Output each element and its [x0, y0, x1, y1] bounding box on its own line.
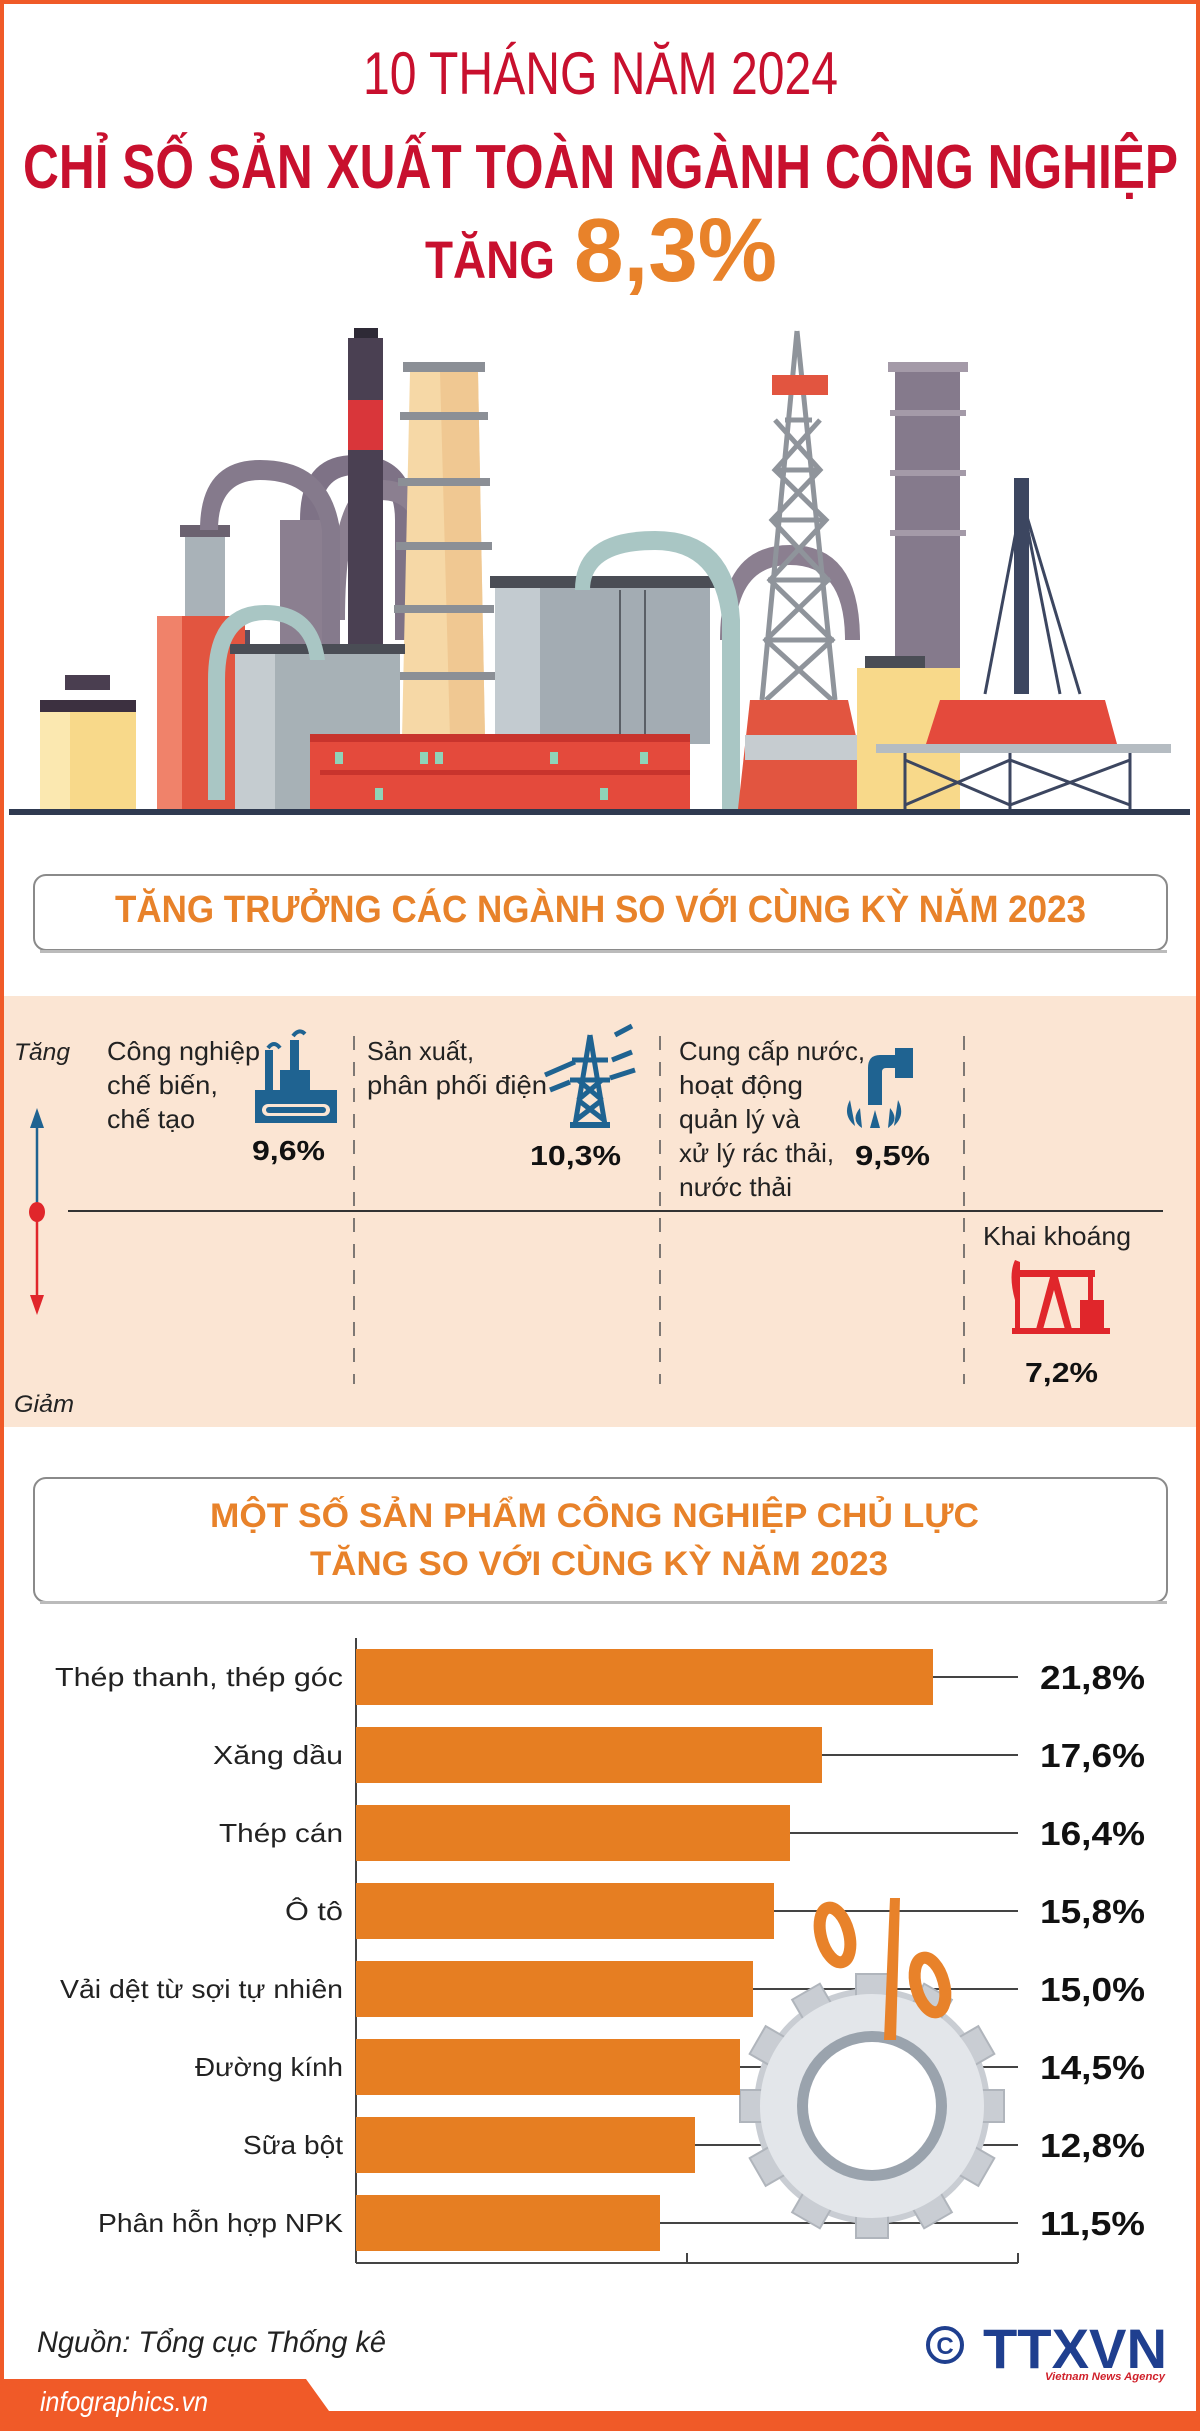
- bar chart: key products: 15,0%: [1040, 1971, 1145, 2008]
- bar chart: key products: 11,5%: [1040, 2205, 1145, 2242]
- sector: water supply: nước thải: [679, 1172, 792, 1202]
- logo: TTXVN: Vietnam News Agency: [1045, 2371, 1166, 2383]
- section header box 2: MỘT SỐ SẢN PHẨM CÔNG NGHIỆP CHỦ LỰC: [210, 1496, 979, 1535]
- logo: TTXVN: C: [936, 2333, 954, 2360]
- gear with percent icon: [740, 1898, 1004, 2238]
- section header box 1: [34, 875, 1167, 953]
- panel: sector growth: Tăng: [14, 1039, 71, 1066]
- right yellow tank: [865, 656, 925, 668]
- sector: electricity: [367, 1026, 635, 1171]
- bar chart: key products: 17,6%: [1040, 1737, 1145, 1774]
- illustration: industrial plant: [9, 328, 1190, 815]
- source note: Nguồn: Tổng cục Thống kê: [37, 2326, 386, 2359]
- icon: factory: [255, 1031, 337, 1123]
- title: 10 THÁNG NĂM 2024: [363, 40, 838, 107]
- bar chart: key products: Ô tô: [285, 1896, 343, 1926]
- title: 8,3%: [574, 201, 777, 301]
- sector: mining: Khai khoáng: [983, 1221, 1131, 1251]
- bar chart: key products: Phân hỗn hợp NPK: [98, 2208, 344, 2238]
- sector: electricity: 10,3%: [530, 1140, 621, 1171]
- left yellow tank: [65, 675, 110, 690]
- section header box 2: [34, 1478, 1167, 1604]
- left grey tank: [230, 644, 405, 654]
- sector: water supply: xử lý rác thải,: [679, 1138, 834, 1168]
- oil derrick: [762, 331, 835, 700]
- footer: infographics.vn: infographics.vn: [40, 2386, 208, 2417]
- center grey tank: [490, 576, 715, 588]
- red long building: [310, 734, 690, 809]
- sector: electricity: Sản xuất,: [367, 1036, 474, 1066]
- bar chart: key products: 16,4%: [1040, 1815, 1145, 1852]
- sector: manufacturing: [107, 1031, 337, 1166]
- sector: water supply: quản lý và: [679, 1104, 801, 1134]
- footer: infographics.vn: [0, 2379, 1200, 2431]
- axis arrow up/down: [29, 1108, 45, 1315]
- bar chart: key products: 14,5%: [1040, 2049, 1145, 2086]
- title: TĂNG: [425, 230, 555, 290]
- panel: sector growth: Giảm: [14, 1391, 74, 1418]
- sector: electricity: phân phối điện: [367, 1070, 547, 1100]
- grey chimney + red block: [180, 525, 230, 537]
- sector: manufacturing: chế tạo: [107, 1104, 195, 1134]
- sector: water supply: [679, 1036, 930, 1202]
- panel: sector growth: [4, 996, 1196, 1427]
- bar chart: key products: 15,8%: [1040, 1893, 1145, 1930]
- sector: water supply: 9,5%: [855, 1140, 930, 1171]
- sector: water supply: Cung cấp nước,: [679, 1036, 865, 1066]
- title: [23, 40, 1178, 301]
- section header box 2: TĂNG SO VỚI CÙNG KỲ NĂM 2023: [310, 1545, 888, 1583]
- sector: manufacturing: Công nghiệp: [107, 1036, 260, 1066]
- dark chimney: [354, 328, 378, 338]
- logo: TTXVN: TTXVN: [983, 2317, 1167, 2380]
- bar chart: key products: Xăng dầu: [213, 1740, 343, 1770]
- sector: manufacturing: chế biến,: [107, 1070, 218, 1100]
- sector: manufacturing: 9,6%: [252, 1135, 325, 1166]
- icon: water tap: [847, 1048, 913, 1128]
- teal arch pipe: [575, 531, 740, 809]
- yellow striped tower: [402, 372, 485, 738]
- right platform: [985, 500, 1080, 694]
- sector: water supply: hoạt động: [679, 1070, 803, 1100]
- bar chart: key products: Đường kính: [195, 2052, 343, 2082]
- sector: mining: 7,2%: [1025, 1357, 1098, 1388]
- bar chart: key products: Vải dệt từ sợi tự nhiên: [60, 1974, 343, 2004]
- icon: power pylon: [545, 1026, 635, 1125]
- bar chart: key products: 21,8%: [1040, 1659, 1145, 1696]
- bar chart: key products: Thép thanh, thép góc: [55, 1662, 343, 1692]
- icon: oil pump: [1012, 1260, 1110, 1334]
- purple arch: [200, 460, 340, 650]
- bar chart: key products: Sữa bột: [243, 2130, 344, 2160]
- bar chart: key products: [55, 1638, 1145, 2263]
- section header box 1: TĂNG TRƯỞNG CÁC NGÀNH SO VỚI CÙNG KỲ NĂM 2023: [115, 887, 1086, 931]
- sector: mining: [983, 1221, 1131, 1388]
- bar chart: key products: Thép cán: [219, 1818, 343, 1848]
- bar chart: key products: 12,8%: [1040, 2127, 1145, 2164]
